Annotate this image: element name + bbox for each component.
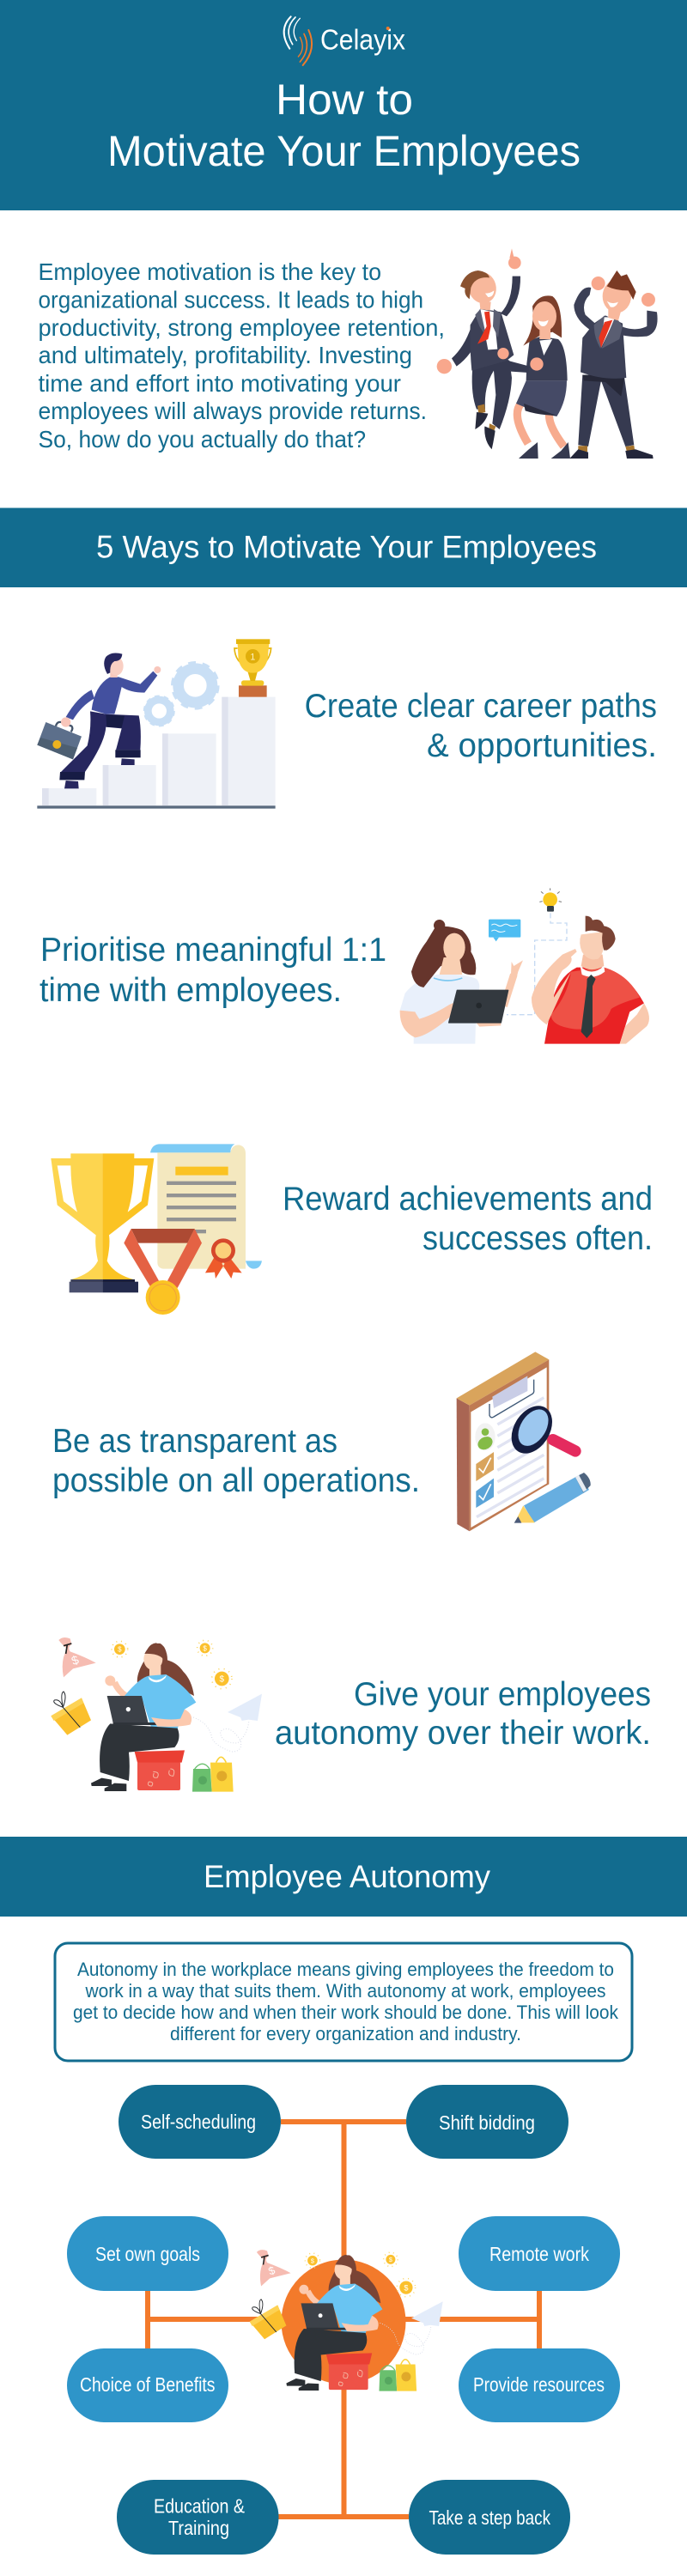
- pill: shift bidding: [406, 2085, 568, 2159]
- clipboard: [457, 1352, 549, 1531]
- trophy cup: [51, 1153, 154, 1292]
- logo: Celayix: Celayix: [320, 24, 405, 55]
- intro text: time and effort into motivating your: [38, 370, 401, 397]
- woman: [497, 295, 570, 459]
- coins: [112, 1640, 232, 1689]
- header panel: [0, 0, 687, 210]
- text: step 4: Be as transparent as: [52, 1423, 337, 1460]
- pill: self-scheduling: [119, 2085, 281, 2159]
- icon: climbing steps to trophy: [37, 639, 276, 809]
- logo: Celayix: [284, 16, 405, 65]
- icon: trophy, certificate and medal: [51, 1144, 262, 1315]
- intro text: productivity, strong employee retention,: [38, 314, 445, 341]
- intro text: employees will always provide returns.: [38, 398, 427, 424]
- pill: take a step back: [409, 2480, 570, 2555]
- pill: education and training: [117, 2480, 278, 2555]
- pill: self-scheduling: Self-scheduling: [141, 2111, 256, 2133]
- shopping bags: [192, 1757, 234, 1792]
- pill: education and training: Education &: [154, 2495, 245, 2518]
- pill: provide resources: [459, 2348, 620, 2422]
- callout: autonomy definition: get to decide how and when their work should be done. This will look: [73, 2002, 619, 2023]
- text: step 4: [52, 1423, 420, 1499]
- pill: set own goals: Set own goals: [95, 2243, 200, 2265]
- trophy: [234, 639, 271, 697]
- callout: autonomy definition: [55, 1943, 632, 2061]
- text: step 2: time with employees.: [40, 972, 342, 1009]
- title: Motivate Your Employees: [107, 127, 581, 175]
- money bag: $: [70, 1652, 81, 1668]
- pencil: [514, 1473, 591, 1523]
- text: step 3: successes often.: [423, 1220, 653, 1257]
- text: step 4: possible on all operations.: [52, 1462, 420, 1499]
- connector and idea bulb: [507, 888, 567, 1015]
- text: step 1: & opportunities.: [427, 727, 657, 764]
- intro text: Employee motivation is the key to: [38, 258, 381, 285]
- intro text: So, how do you actually do that?: [38, 426, 366, 453]
- band heading: 5 ways: 5 Ways to Motivate Your Employees: [96, 529, 597, 565]
- diagram: autonomy connectors: [145, 2119, 542, 2519]
- certificate: [150, 1144, 262, 1269]
- coins: $: [118, 1646, 122, 1654]
- text: step 3: [283, 1181, 653, 1257]
- gift box: [51, 1692, 91, 1735]
- pill: take a step back: Take a step back: [429, 2506, 550, 2529]
- woman with tablet: [400, 920, 523, 1044]
- callout: autonomy definition: different for every organization and industry.: [170, 2023, 521, 2044]
- coins: $: [220, 1675, 225, 1685]
- pill: remote work: Remote work: [489, 2243, 589, 2265]
- text: step 5: autonomy over their work.: [275, 1715, 651, 1752]
- text: step 3: Reward achievements and: [283, 1181, 653, 1218]
- icon: central woman with rewards: [250, 2250, 443, 2391]
- red gift seat: [135, 1750, 185, 1790]
- climbing man: [59, 653, 161, 788]
- text: step 5: [275, 1676, 651, 1752]
- callout: autonomy definition: Autonomy in the workplace means giving employees the freedom to: [77, 1959, 614, 1980]
- money bag: [58, 1637, 96, 1677]
- text: step 1: [305, 688, 657, 764]
- pill: shift bidding: Shift bidding: [439, 2111, 535, 2134]
- speech bubble: [489, 920, 520, 941]
- text: step 5: Give your employees: [354, 1676, 651, 1713]
- icon: clipboard, magnifier and pencil: [457, 1352, 591, 1531]
- coins: $: [203, 1644, 207, 1652]
- gears: [144, 663, 217, 726]
- pill: education and training: Training: [168, 2517, 229, 2539]
- man two: [569, 270, 658, 459]
- band heading: employee autonomy: [0, 1837, 687, 1917]
- icon: one-to-one conversation: [400, 888, 649, 1044]
- pill: set own goals: [67, 2216, 228, 2291]
- band heading: 5 ways: [0, 508, 687, 587]
- trophy: 1: [250, 652, 255, 662]
- seated woman: [91, 1643, 196, 1791]
- band heading: employee autonomy: Employee Autonomy: [204, 1859, 490, 1894]
- intro text: [38, 258, 445, 453]
- intro text: organizational success. It leads to high: [38, 287, 423, 313]
- icon: three cheering business people: [437, 248, 658, 459]
- callout: autonomy definition: work in a way that suits them. With autonomy at work, employees: [85, 1980, 605, 2002]
- text: step 1: Create clear career paths: [305, 688, 657, 725]
- medal: [124, 1229, 202, 1315]
- intro text: and ultimately, profitability. Investing: [38, 342, 412, 368]
- man with red shirt: [532, 916, 649, 1044]
- pill: remote work: [459, 2216, 620, 2291]
- title: [107, 76, 581, 175]
- text: step 2: [40, 932, 386, 1009]
- man one, jumping: [437, 248, 521, 449]
- rosette: [205, 1238, 242, 1279]
- text: step 2: Prioritise meaningful 1:1: [40, 932, 386, 969]
- paper plane: [193, 1694, 262, 1752]
- pill: choice of benefits: [67, 2348, 228, 2422]
- icon: woman working on laptop with rewards: [51, 1637, 262, 1792]
- magnifying glass: [503, 1399, 575, 1461]
- steps: [42, 697, 276, 805]
- pill: provide resources: Provide resources: [473, 2373, 605, 2396]
- title: How to: [276, 76, 413, 124]
- briefcase: [37, 717, 82, 759]
- pill: choice of benefits: Choice of Benefits: [80, 2373, 215, 2396]
